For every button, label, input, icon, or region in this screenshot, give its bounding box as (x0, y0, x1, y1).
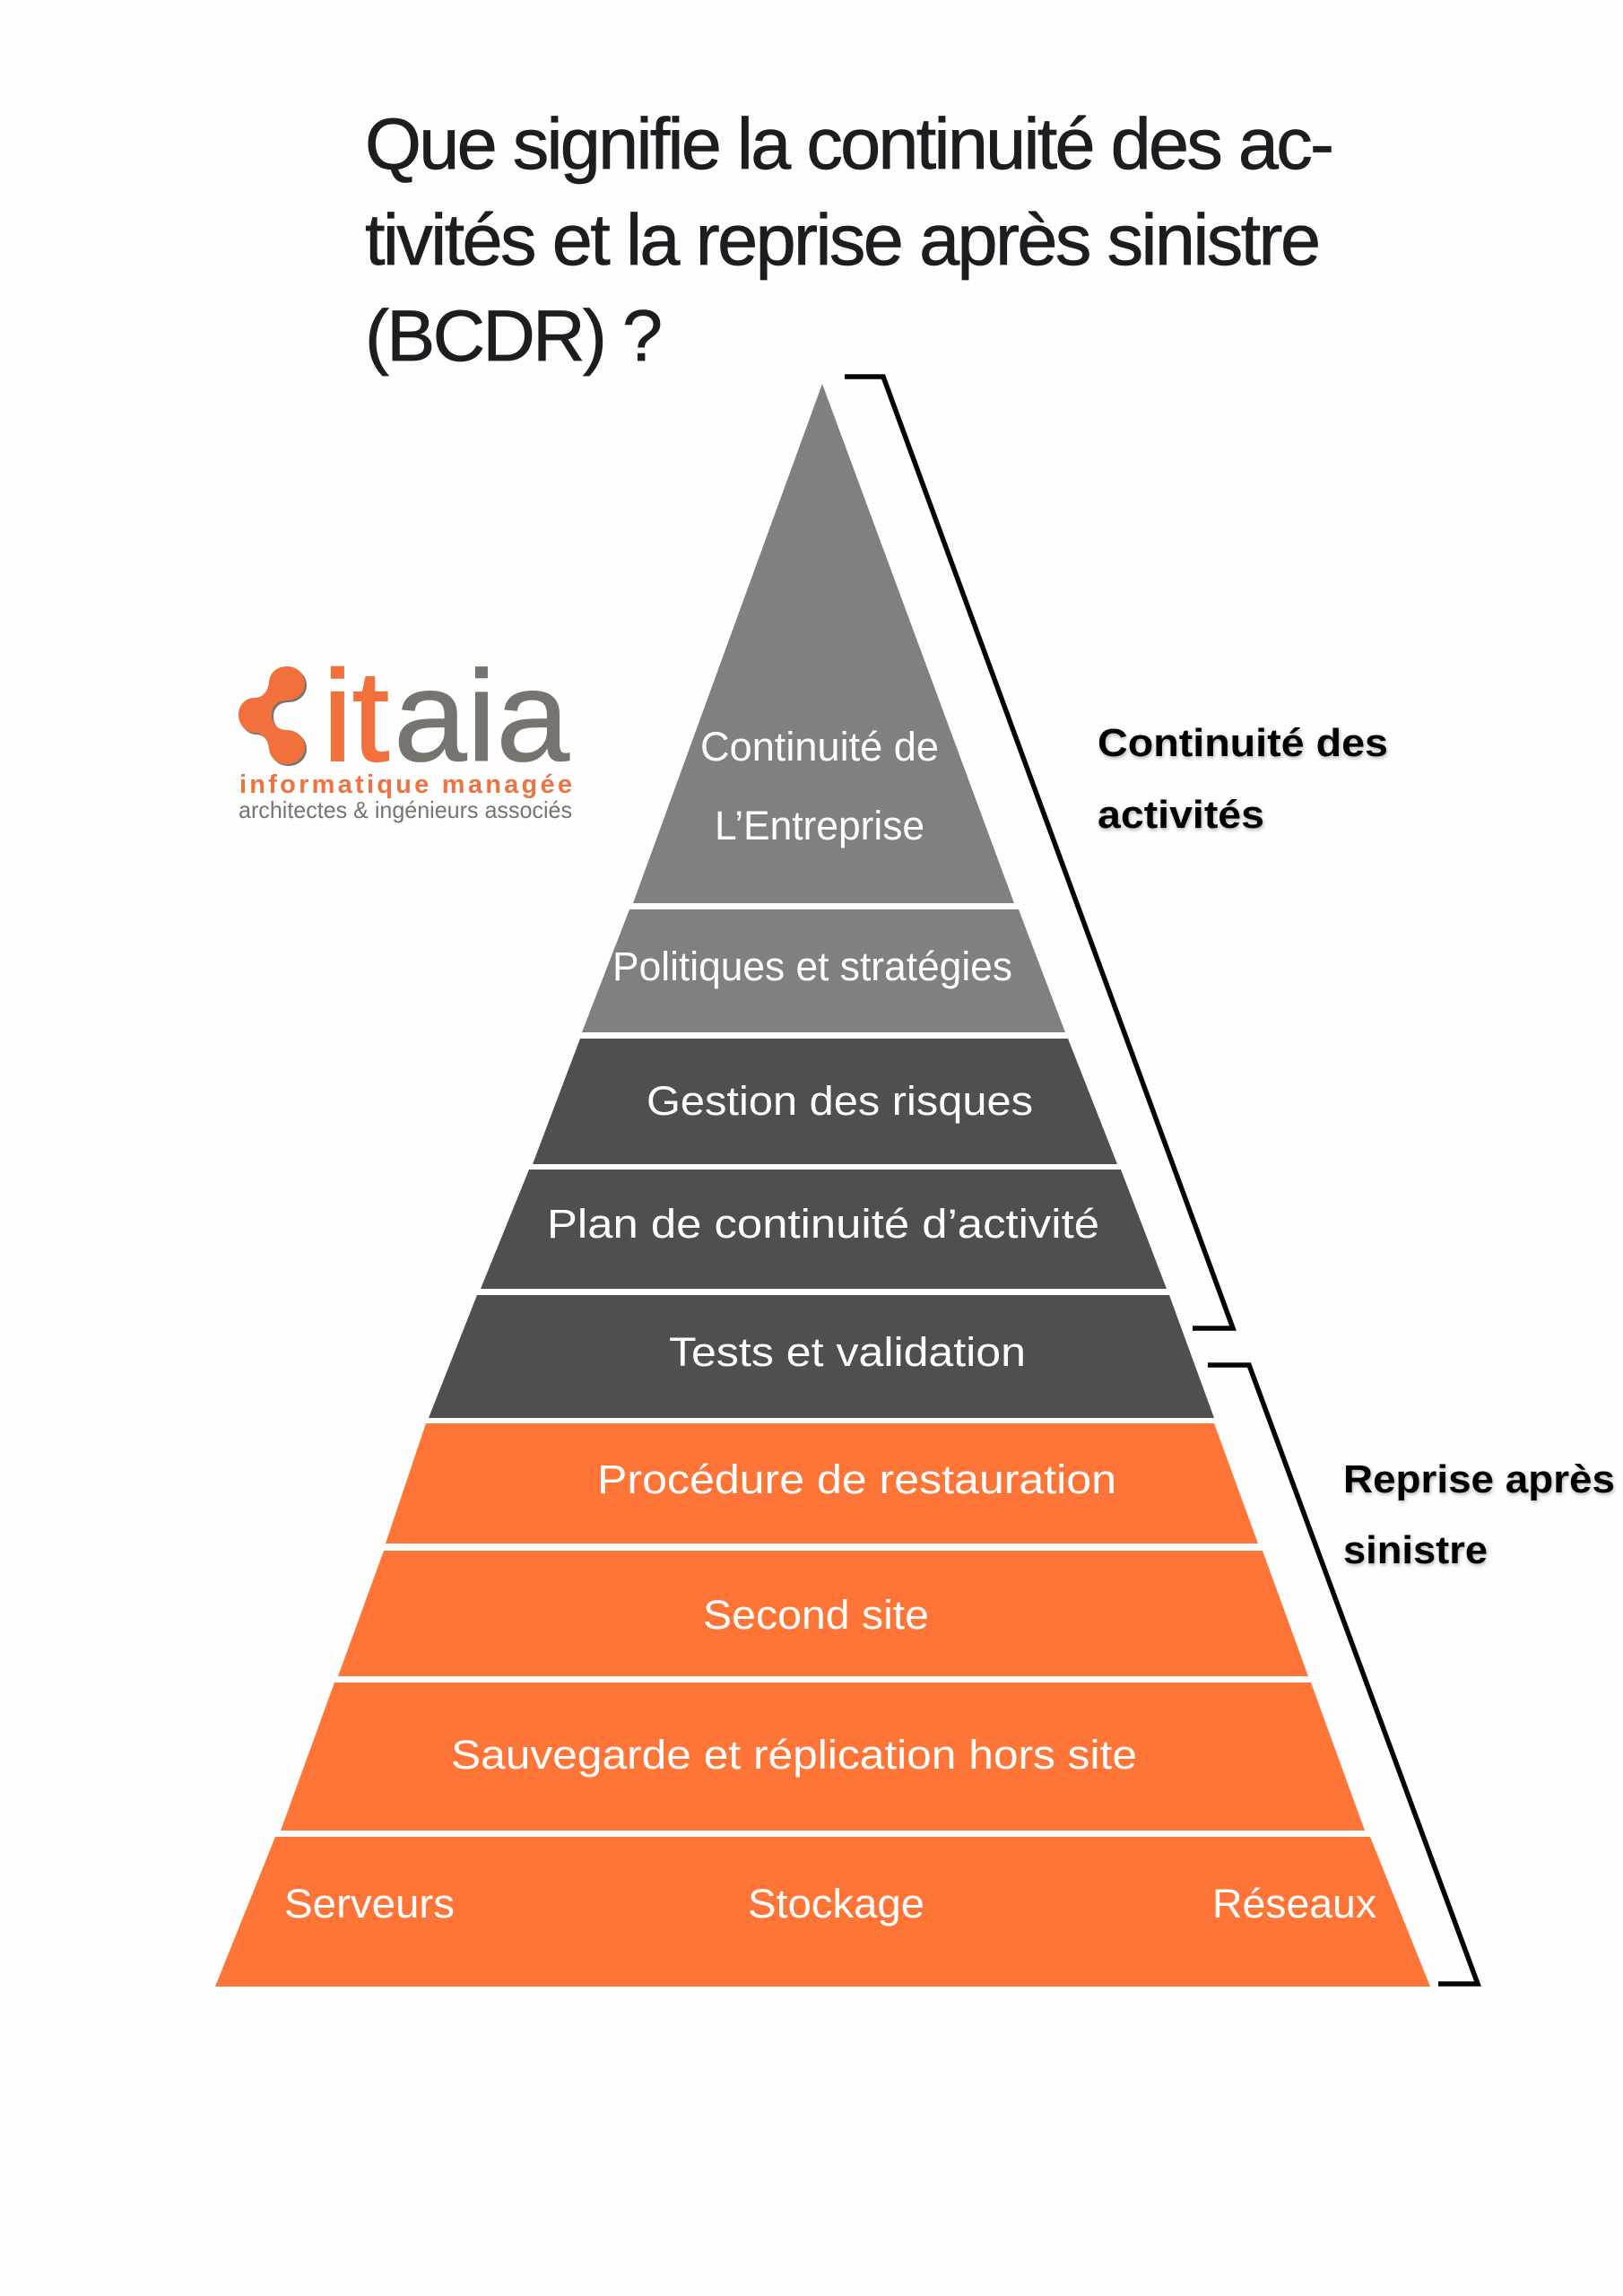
band: Gestion des risques (533, 1039, 1117, 1164)
band: Second site: Second site (703, 1592, 929, 1638)
band: Serveurs, Stockage, Réseaux (215, 1837, 1430, 1987)
band: Serveurs, Stockage, Réseaux: Réseaux (1212, 1881, 1377, 1926)
title: Que signifie la continuité des ac- (365, 104, 1334, 185)
logo tagline: informatique managée (239, 770, 572, 799)
label: Continuité des activités: activités (1098, 793, 1264, 837)
label: Reprise après sinistre: sinistre (1343, 1528, 1488, 1572)
band: Serveurs, Stockage, Réseaux: Stockage (748, 1881, 924, 1926)
band: Procédure de restauration: Procédure de restauration (597, 1457, 1116, 1502)
label: Reprise après sinistre: Reprise après (1343, 1457, 1615, 1501)
band: Plan de continuité d'activité (481, 1170, 1167, 1289)
label: Continuité des activités (1098, 721, 1388, 837)
band: Continuité de L'Entreprise: L’Entreprise (715, 803, 924, 848)
band: Procédure de restauration (386, 1423, 1258, 1544)
band: Serveurs, Stockage, Réseaux: Serveurs (284, 1881, 455, 1926)
band: Continuité de L'Entreprise (633, 384, 1014, 903)
band: Politiques et stratégies (582, 909, 1065, 1032)
band: Sauvegarde et réplication hors site (281, 1683, 1365, 1831)
logo: itaia (239, 644, 572, 823)
band: Second site (338, 1551, 1308, 1676)
logo wordmark: it (323, 644, 389, 788)
band: Sauvegarde et réplication hors site: Sauvegarde et réplication hors site (451, 1732, 1137, 1778)
pyramid (215, 384, 1430, 1987)
logo tagline (239, 770, 572, 823)
band: Politiques et stratégies: Politiques et stratégies (612, 944, 1012, 989)
band: Continuité de L'Entreprise: Continuité de (700, 724, 939, 770)
band: Tests et validation (429, 1295, 1214, 1418)
title (365, 104, 1334, 377)
band: Plan de continuité d'activité: Plan de continuité d’activité (547, 1201, 1099, 1247)
title: tivités et la reprise après sinistre (365, 200, 1321, 281)
label: Continuité des activités: Continuité des (1098, 721, 1388, 765)
bracket: reprise après sinistre (1208, 1365, 1478, 1984)
icon: logo blob (239, 666, 307, 766)
band: Tests et validation: Tests et validation (669, 1329, 1026, 1375)
logo wordmark (323, 644, 570, 788)
logo tagline: architectes & ingénieurs associés (239, 796, 572, 823)
label: Reprise après sinistre (1343, 1457, 1615, 1572)
title: (BCDR) ? (365, 296, 663, 377)
bracket: continuité des activités (845, 377, 1233, 1328)
logo wordmark: aia (394, 644, 570, 788)
band: Gestion des risques: Gestion des risques (647, 1078, 1033, 1124)
